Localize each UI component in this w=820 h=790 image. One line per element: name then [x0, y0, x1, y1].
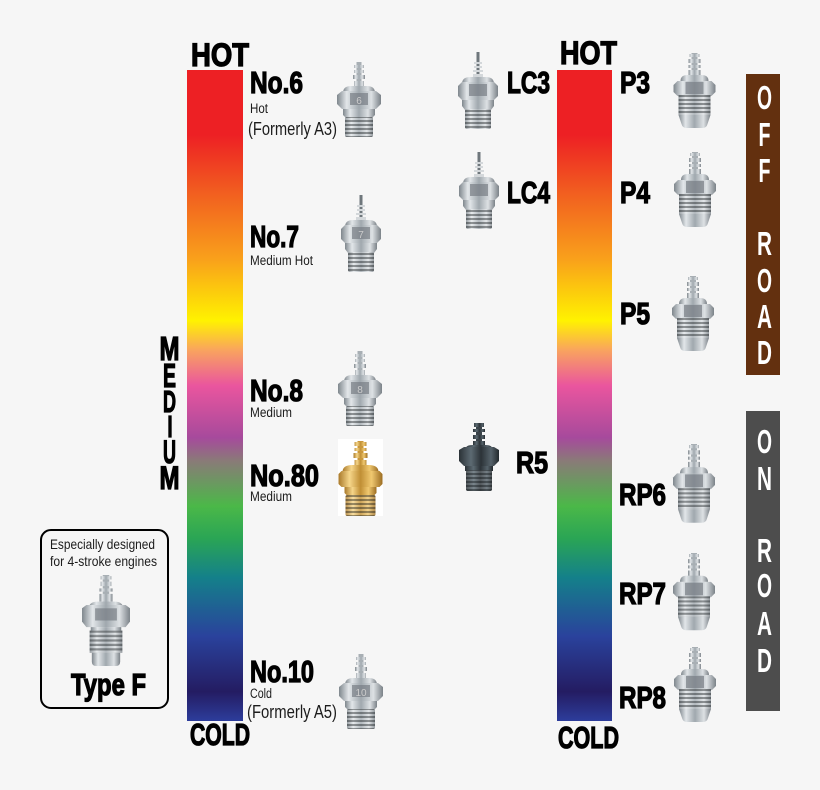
label: No.8: Medium — [250, 405, 292, 420]
icon: plug No.10 — [339, 654, 383, 729]
label: No.10: (Formerly A5) — [247, 702, 337, 722]
icon: plug P3 — [674, 53, 716, 128]
icon: plug No.6: 6 — [356, 96, 362, 107]
icon: plug RP8 — [674, 647, 716, 722]
icon: plug No.10: 10 — [355, 688, 367, 699]
panel: right heat range scale — [557, 35, 619, 755]
icon: Type F plug — [82, 575, 130, 666]
label: No.8: No.8 — [250, 373, 303, 408]
panel: on road: O — [757, 423, 772, 460]
heading: left hot: HOT — [191, 37, 249, 73]
label: No.8 — [250, 373, 303, 420]
icon: plug No.7: 7 — [358, 230, 364, 241]
label: No.10 — [247, 654, 337, 722]
label: LC4: LC4 — [507, 175, 551, 210]
icon: plug No.6 — [337, 62, 381, 137]
panel: on road: D — [757, 642, 772, 679]
label: R5: R5 — [516, 445, 548, 480]
panel: off road: A — [757, 298, 772, 335]
label: No.80: No.80 — [250, 458, 319, 493]
panel: off road — [746, 74, 780, 375]
panel: off road: O — [757, 262, 772, 299]
label: P3: P3 — [620, 65, 650, 100]
text: callout description — [50, 536, 157, 569]
gradient bar: left — [187, 70, 243, 721]
icon: plug LC3 — [458, 52, 498, 129]
panel: on road: N — [757, 460, 772, 497]
label: No.6 — [248, 65, 337, 139]
panel: on road: A — [757, 605, 772, 642]
panel: off road: D — [757, 334, 772, 371]
icon: plug RP6 — [673, 444, 715, 523]
label: No.7 — [250, 219, 313, 268]
label: No.7: No.7 — [250, 219, 299, 254]
label: P5: P5 — [620, 296, 650, 331]
panel: off road: F — [758, 116, 770, 153]
icon: plug No.7 — [341, 195, 381, 272]
gradient bar: right — [557, 70, 612, 721]
vertical label: medium: M — [160, 330, 180, 367]
heading: left cold: COLD — [190, 717, 250, 752]
icon: dark plug R5 — [459, 423, 499, 491]
icon: plug No.8: 8 — [357, 385, 363, 396]
heading: right cold: COLD — [558, 720, 619, 755]
panel: on road — [746, 411, 780, 711]
label: No.80: Medium — [250, 489, 292, 504]
panel: off road: O — [757, 79, 772, 116]
label: P4: P4 — [620, 175, 651, 210]
icon: plug RP7 — [673, 553, 715, 630]
heading: right hot: HOT — [560, 35, 617, 71]
label: No.6: (Formerly A3) — [248, 119, 337, 139]
vertical label: medium: M — [160, 460, 180, 496]
panel: off road: F — [758, 152, 770, 189]
label: LC3: LC3 — [507, 65, 550, 100]
vertical label: medium: D — [163, 384, 176, 419]
label: Type F: Type F — [71, 667, 146, 702]
label: No.10: Cold — [250, 686, 272, 701]
panel: off road: R — [757, 225, 772, 262]
label: No.10: No.10 — [250, 654, 314, 689]
vertical label: medium: I — [168, 409, 172, 444]
icon: plug P5 — [672, 276, 714, 351]
vertical label: medium: U — [163, 434, 176, 470]
label: No.6: Hot — [250, 101, 268, 116]
vertical label: medium: E — [163, 357, 176, 394]
panel: on road: O — [757, 567, 772, 604]
label: No.7: Medium Hot — [250, 253, 313, 268]
panel: left heat range scale — [187, 37, 250, 752]
label: RP6: RP6 — [619, 477, 666, 512]
label: RP7: RP7 — [619, 576, 666, 611]
panel: Type F callout — [41, 530, 168, 708]
text: callout description: Especially designed — [50, 536, 155, 552]
label: No.6: No.6 — [250, 65, 303, 100]
vertical label: medium — [160, 330, 180, 496]
icon: plug LC4 — [459, 152, 499, 229]
icon: plug No.8 — [338, 351, 382, 426]
icon: plug P4 — [674, 152, 716, 227]
panel: on road: R — [757, 532, 772, 569]
text: callout description: for 4-stroke engines — [50, 553, 157, 569]
label: RP8: RP8 — [619, 680, 666, 715]
label: No.80 — [250, 458, 319, 504]
icon: gold plug No.80 — [338, 439, 383, 516]
